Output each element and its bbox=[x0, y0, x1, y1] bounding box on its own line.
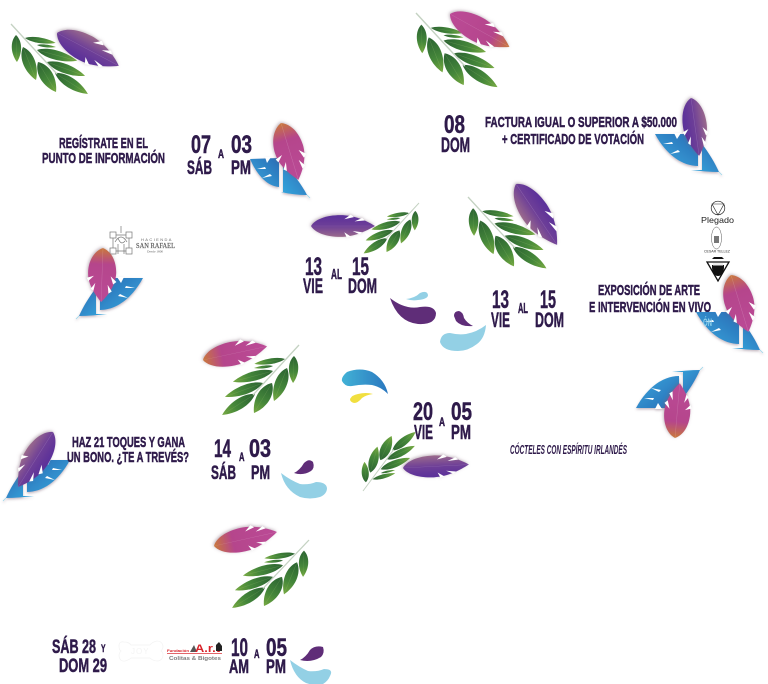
branch and purple feather, under 20 VIE bbox=[357, 428, 470, 491]
partial label on blue feather: ÓN bbox=[703, 316, 712, 329]
logo: Hacienda San Rafael: SAN RAFAEL bbox=[136, 241, 175, 250]
date: 07 SÁB a 03 PM: 03 bbox=[231, 131, 252, 159]
date: 07 SÁB a 03 PM: A bbox=[218, 147, 224, 161]
branch and purple feather, top left bbox=[11, 21, 125, 98]
logo: Fundación Art Colitas y Bigotes bbox=[167, 642, 222, 662]
date: 13 VIE al 15 DOM, right bbox=[491, 286, 564, 332]
branch and pink feather, bottom bbox=[211, 520, 309, 612]
event: registro bbox=[42, 131, 252, 179]
date: 14 SÁB a 03 PM: PM bbox=[251, 463, 270, 484]
date: 20 VIE a 05 PM: 20 bbox=[413, 398, 433, 426]
splash: purple and light blue, 10 AM bbox=[290, 646, 331, 684]
date: 10 AM a 05 PM: PM bbox=[266, 657, 286, 678]
feathers: blue and pink, left bbox=[76, 247, 143, 319]
description: exposición de arte bbox=[589, 281, 711, 316]
date: 07 SÁB a 03 PM: SÁB bbox=[187, 157, 212, 179]
splash: purple and light blue drops bbox=[390, 292, 486, 351]
description: exposición de arte: EXPOSICIÓN DE ARTE bbox=[598, 281, 700, 299]
branch and purple feather, 13 al 15 left bbox=[311, 203, 419, 257]
description: 21 toques: HAZ 21 TOQUES Y GANA bbox=[72, 434, 185, 451]
date: 13 VIE al 15 DOM, left: 15 bbox=[352, 253, 369, 281]
branch and pink feather, center left bbox=[200, 334, 299, 419]
date: 20 VIE a 05 PM: VIE bbox=[414, 422, 433, 444]
description: 21 toques bbox=[67, 434, 189, 466]
feathers: blue and pink, right bbox=[696, 271, 763, 353]
splash: blue and yellow drops bbox=[342, 370, 388, 403]
date: 13 VIE al 15 DOM, left: DOM bbox=[348, 275, 377, 298]
date: 13 VIE al 15 DOM, left: AL bbox=[331, 266, 342, 283]
date: 08 DOM bbox=[441, 111, 470, 157]
logo: Fundación Art Colitas y Bigotes: Fundación bbox=[167, 649, 190, 653]
feathers: blue and purple beside factura bbox=[655, 96, 722, 175]
date: SÁB 28 y DOM 29: Y bbox=[101, 643, 106, 655]
date: SÁB 28 y DOM 29: SÁB 28 bbox=[52, 636, 96, 658]
date: 14 SÁB a 03 PM: A bbox=[239, 450, 245, 464]
splash: purple and light blue, 14 SÁB bbox=[281, 460, 327, 498]
logo: Hacienda San Rafael: Desde 1800 bbox=[147, 250, 163, 254]
date: 20 VIE a 05 PM: 05 bbox=[451, 398, 472, 426]
date: 13 VIE al 15 DOM, left: 13 bbox=[305, 253, 322, 281]
date: 13 VIE al 15 DOM, right: DOM bbox=[535, 309, 564, 332]
description: registro: PUNTO DE INFORMACIÓN bbox=[42, 149, 165, 167]
date: 13 VIE al 15 DOM, right: 13 bbox=[492, 286, 509, 314]
description: cócteles: CÓCTELES CON ESPÍRITU IRLANDÉS bbox=[510, 442, 627, 457]
date: 13 VIE al 15 DOM, right: 15 bbox=[540, 286, 556, 314]
feathers: blue and pink beside 07 bbox=[250, 119, 313, 198]
date: SÁB 28 y DOM 29: DOM 29 bbox=[59, 656, 107, 677]
date: 14 SÁB a 03 PM: SÁB bbox=[211, 462, 236, 484]
description: factura: + CERTIFICADO DE VOTACIÓN bbox=[502, 130, 644, 148]
logo: faint Joy bone bbox=[119, 641, 163, 661]
logo: Cesar Tellez: CESAR TELLEZ bbox=[704, 250, 731, 254]
date: 13 VIE al 15 DOM, right: AL bbox=[518, 300, 528, 317]
date: 13 VIE al 15 DOM, right: VIE bbox=[491, 309, 510, 332]
date: 10 AM a 05 PM: AM bbox=[229, 657, 249, 678]
branch and purple feather, 13 al 15 right bbox=[468, 176, 569, 273]
logo: Fundación Art Colitas y Bigotes: Colitas & Bigotes bbox=[169, 656, 221, 662]
date: 08 DOM: 08 bbox=[444, 111, 465, 139]
feathers: blue and purple, 21 toques bbox=[3, 424, 70, 501]
branch and pink feather, top center bbox=[416, 3, 516, 92]
date: 14 SÁB a 03 PM bbox=[211, 435, 271, 484]
description: registro bbox=[42, 135, 165, 167]
description: factura bbox=[485, 114, 677, 148]
description: 21 toques: UN BONO. ¿TE A TREVÉS? bbox=[67, 449, 189, 466]
date: 07 SÁB a 03 PM bbox=[187, 131, 252, 179]
logo: faint Joy bone: JOY bbox=[131, 647, 150, 656]
event: factura bbox=[441, 111, 677, 157]
date: 13 VIE al 15 DOM, left: VIE bbox=[303, 275, 323, 298]
date: 08 DOM: DOM bbox=[441, 134, 470, 157]
feathers: blue and pink, lower right bbox=[636, 367, 703, 439]
logo: Plegado bbox=[701, 201, 734, 225]
logo: Hacienda San Rafael: HACIENDA bbox=[141, 237, 173, 242]
logo: Plegado: Plegado bbox=[701, 215, 734, 225]
date: 14 SÁB a 03 PM: 14 bbox=[214, 435, 231, 463]
date: 14 SÁB a 03 PM: 03 bbox=[249, 435, 271, 463]
date: 13 VIE al 15 DOM, left bbox=[303, 253, 377, 298]
date: 10 AM a 05 PM: 10 bbox=[231, 634, 248, 662]
logo: Cesar Tellez bbox=[704, 227, 731, 254]
date: 10 AM a 05 PM: A bbox=[254, 647, 260, 661]
date: 07 SÁB a 03 PM: 07 bbox=[191, 131, 211, 159]
date: 20 VIE a 05 PM bbox=[413, 398, 472, 444]
logo: Fundación Art Colitas y Bigotes: A.r.t bbox=[195, 643, 220, 655]
date: 07 SÁB a 03 PM: PM bbox=[231, 158, 251, 179]
date: 20 VIE a 05 PM: PM bbox=[451, 422, 471, 444]
date: 20 VIE a 05 PM: A bbox=[439, 415, 445, 429]
description: registro: REGÍSTRATE EN EL bbox=[59, 135, 148, 152]
date: 10 AM a 05 PM: 05 bbox=[266, 634, 287, 662]
date: 10 AM a 05 PM bbox=[229, 634, 287, 678]
logo: Hacienda San Rafael bbox=[110, 226, 175, 254]
logo: triangle portrait bbox=[707, 257, 729, 281]
date: SÁB 28 y DOM 29 bbox=[52, 636, 107, 677]
